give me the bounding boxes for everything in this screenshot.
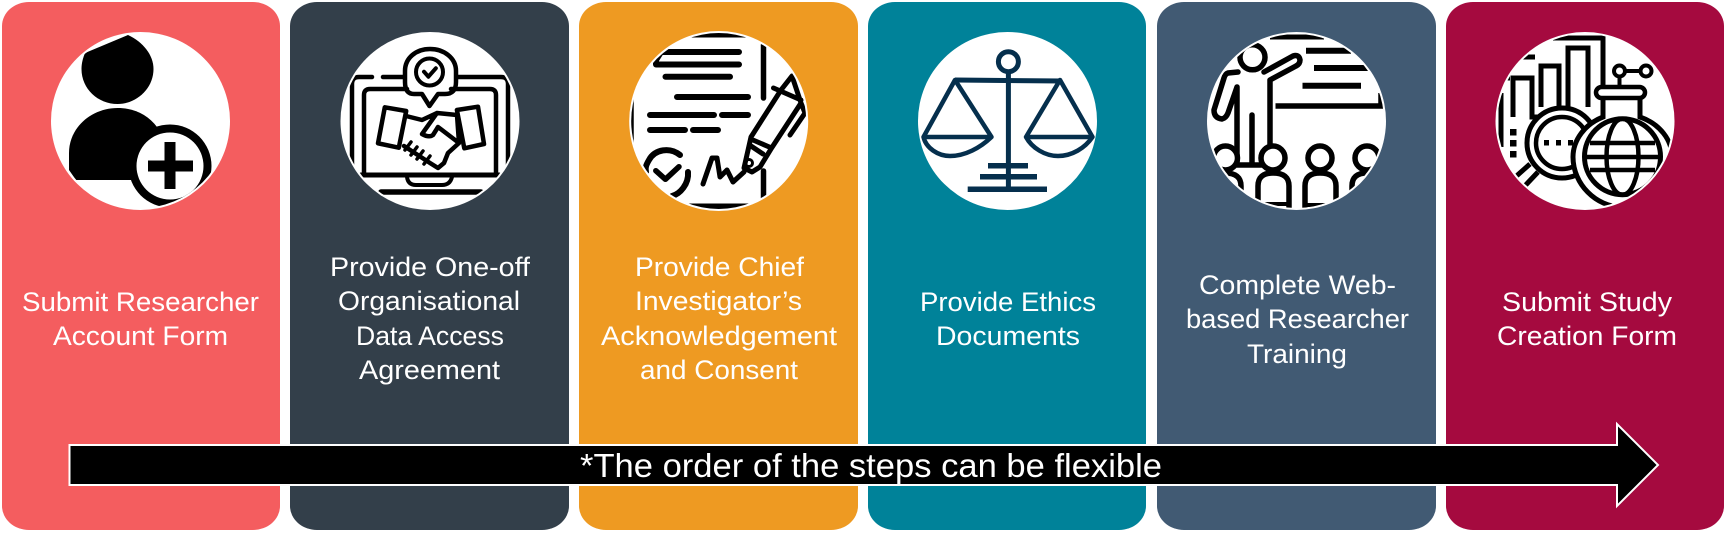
step label: Data Access: [356, 321, 504, 351]
step label: Account Form: [53, 321, 228, 351]
icon: charts, magnifier and globe flask: [1496, 32, 1674, 210]
panel: Provide Ethics Documents: [868, 2, 1146, 530]
panel: Submit Study Creation Form: [1446, 2, 1724, 530]
panel: Submit Researcher Account Form: [2, 2, 280, 530]
step label: [22, 287, 259, 351]
icon: user with plus sign: [51, 32, 230, 210]
step label: Organisational: [338, 286, 520, 316]
icon: presenter with audience: [1207, 32, 1386, 212]
step label: Investigator’s: [635, 286, 802, 316]
step label: Provide Ethics: [920, 287, 1096, 317]
step label: [920, 287, 1096, 351]
step label: [1186, 270, 1409, 369]
panel: Provide Chief Investigator's Acknowledgement and Consent: [579, 2, 858, 530]
arrow: flexible order of steps: [70, 424, 1658, 506]
step label: Documents: [936, 321, 1080, 351]
panel: Complete Web-based Researcher Training: [1157, 2, 1436, 530]
step label: [601, 252, 838, 385]
step label: [1497, 287, 1677, 351]
step label: Submit Researcher: [22, 287, 259, 317]
step label: [330, 252, 531, 385]
step label: Submit Study: [1502, 287, 1673, 317]
panel: Provide One-off Organisational Data Access Agreement: [290, 2, 569, 530]
step label: Training: [1247, 339, 1347, 369]
arrow caption: *The order of the steps can be flexible: [580, 447, 1162, 484]
icon: scales of justice: [918, 32, 1097, 210]
step label: Provide One-off: [330, 252, 531, 282]
icon: laptop with handshake: [340, 32, 520, 210]
step label: Complete Web-: [1199, 270, 1396, 300]
step label: Provide Chief: [635, 252, 805, 282]
step label: Acknowledgement: [601, 321, 838, 351]
step label: Creation Form: [1497, 321, 1677, 351]
step label: Agreement: [359, 355, 501, 385]
step label: based Researcher: [1186, 304, 1409, 334]
step label: and Consent: [640, 355, 799, 385]
icon: signed document with pen: [629, 31, 808, 211]
